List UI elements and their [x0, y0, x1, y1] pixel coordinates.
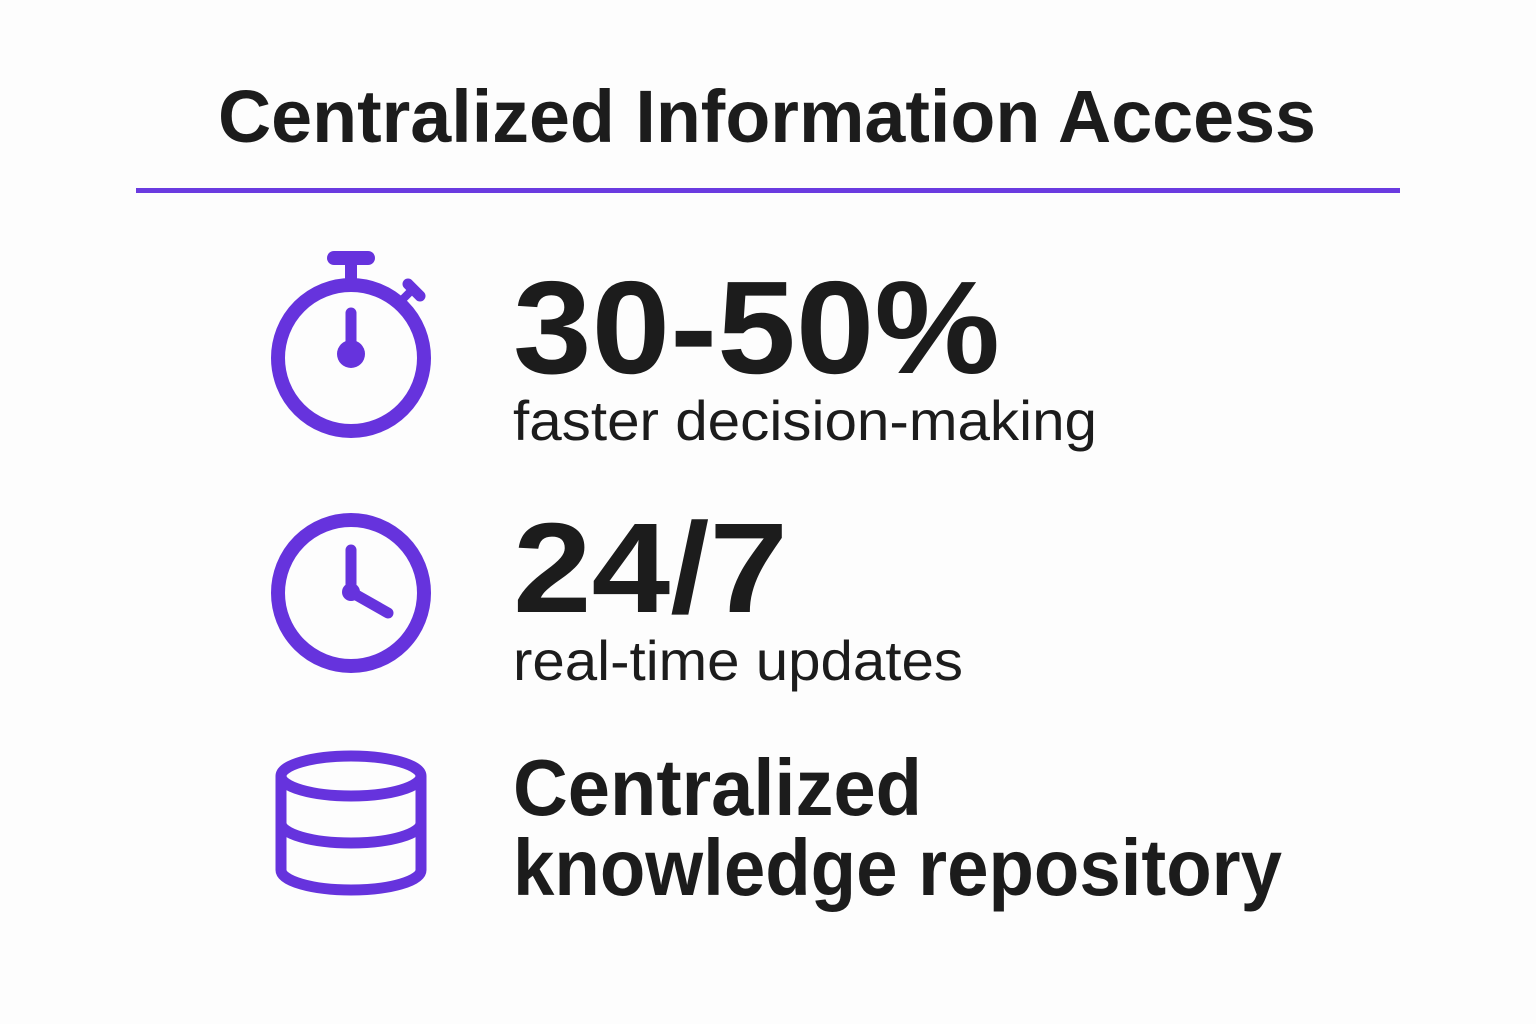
stat: centralized knowledge repository: Centralized — [513, 743, 922, 832]
icon: stopwatch — [278, 258, 424, 431]
stat: 24/7 — [513, 497, 963, 692]
icon: clock — [278, 520, 424, 666]
stat: 24/7: real-time updates — [513, 629, 963, 692]
stat: centralized knowledge repository — [513, 743, 1282, 912]
stat: 24/7: 24/7 — [513, 497, 788, 640]
stat: 30-50%: 30-50% — [513, 254, 1000, 401]
stat: 30-50%: faster decision-making — [513, 389, 1097, 452]
title: Centralized Information Access — [218, 75, 1316, 158]
stat: 30-50% — [513, 254, 1097, 452]
stat: centralized knowledge repository: knowledge repository — [513, 823, 1282, 912]
icon: database — [281, 756, 421, 890]
